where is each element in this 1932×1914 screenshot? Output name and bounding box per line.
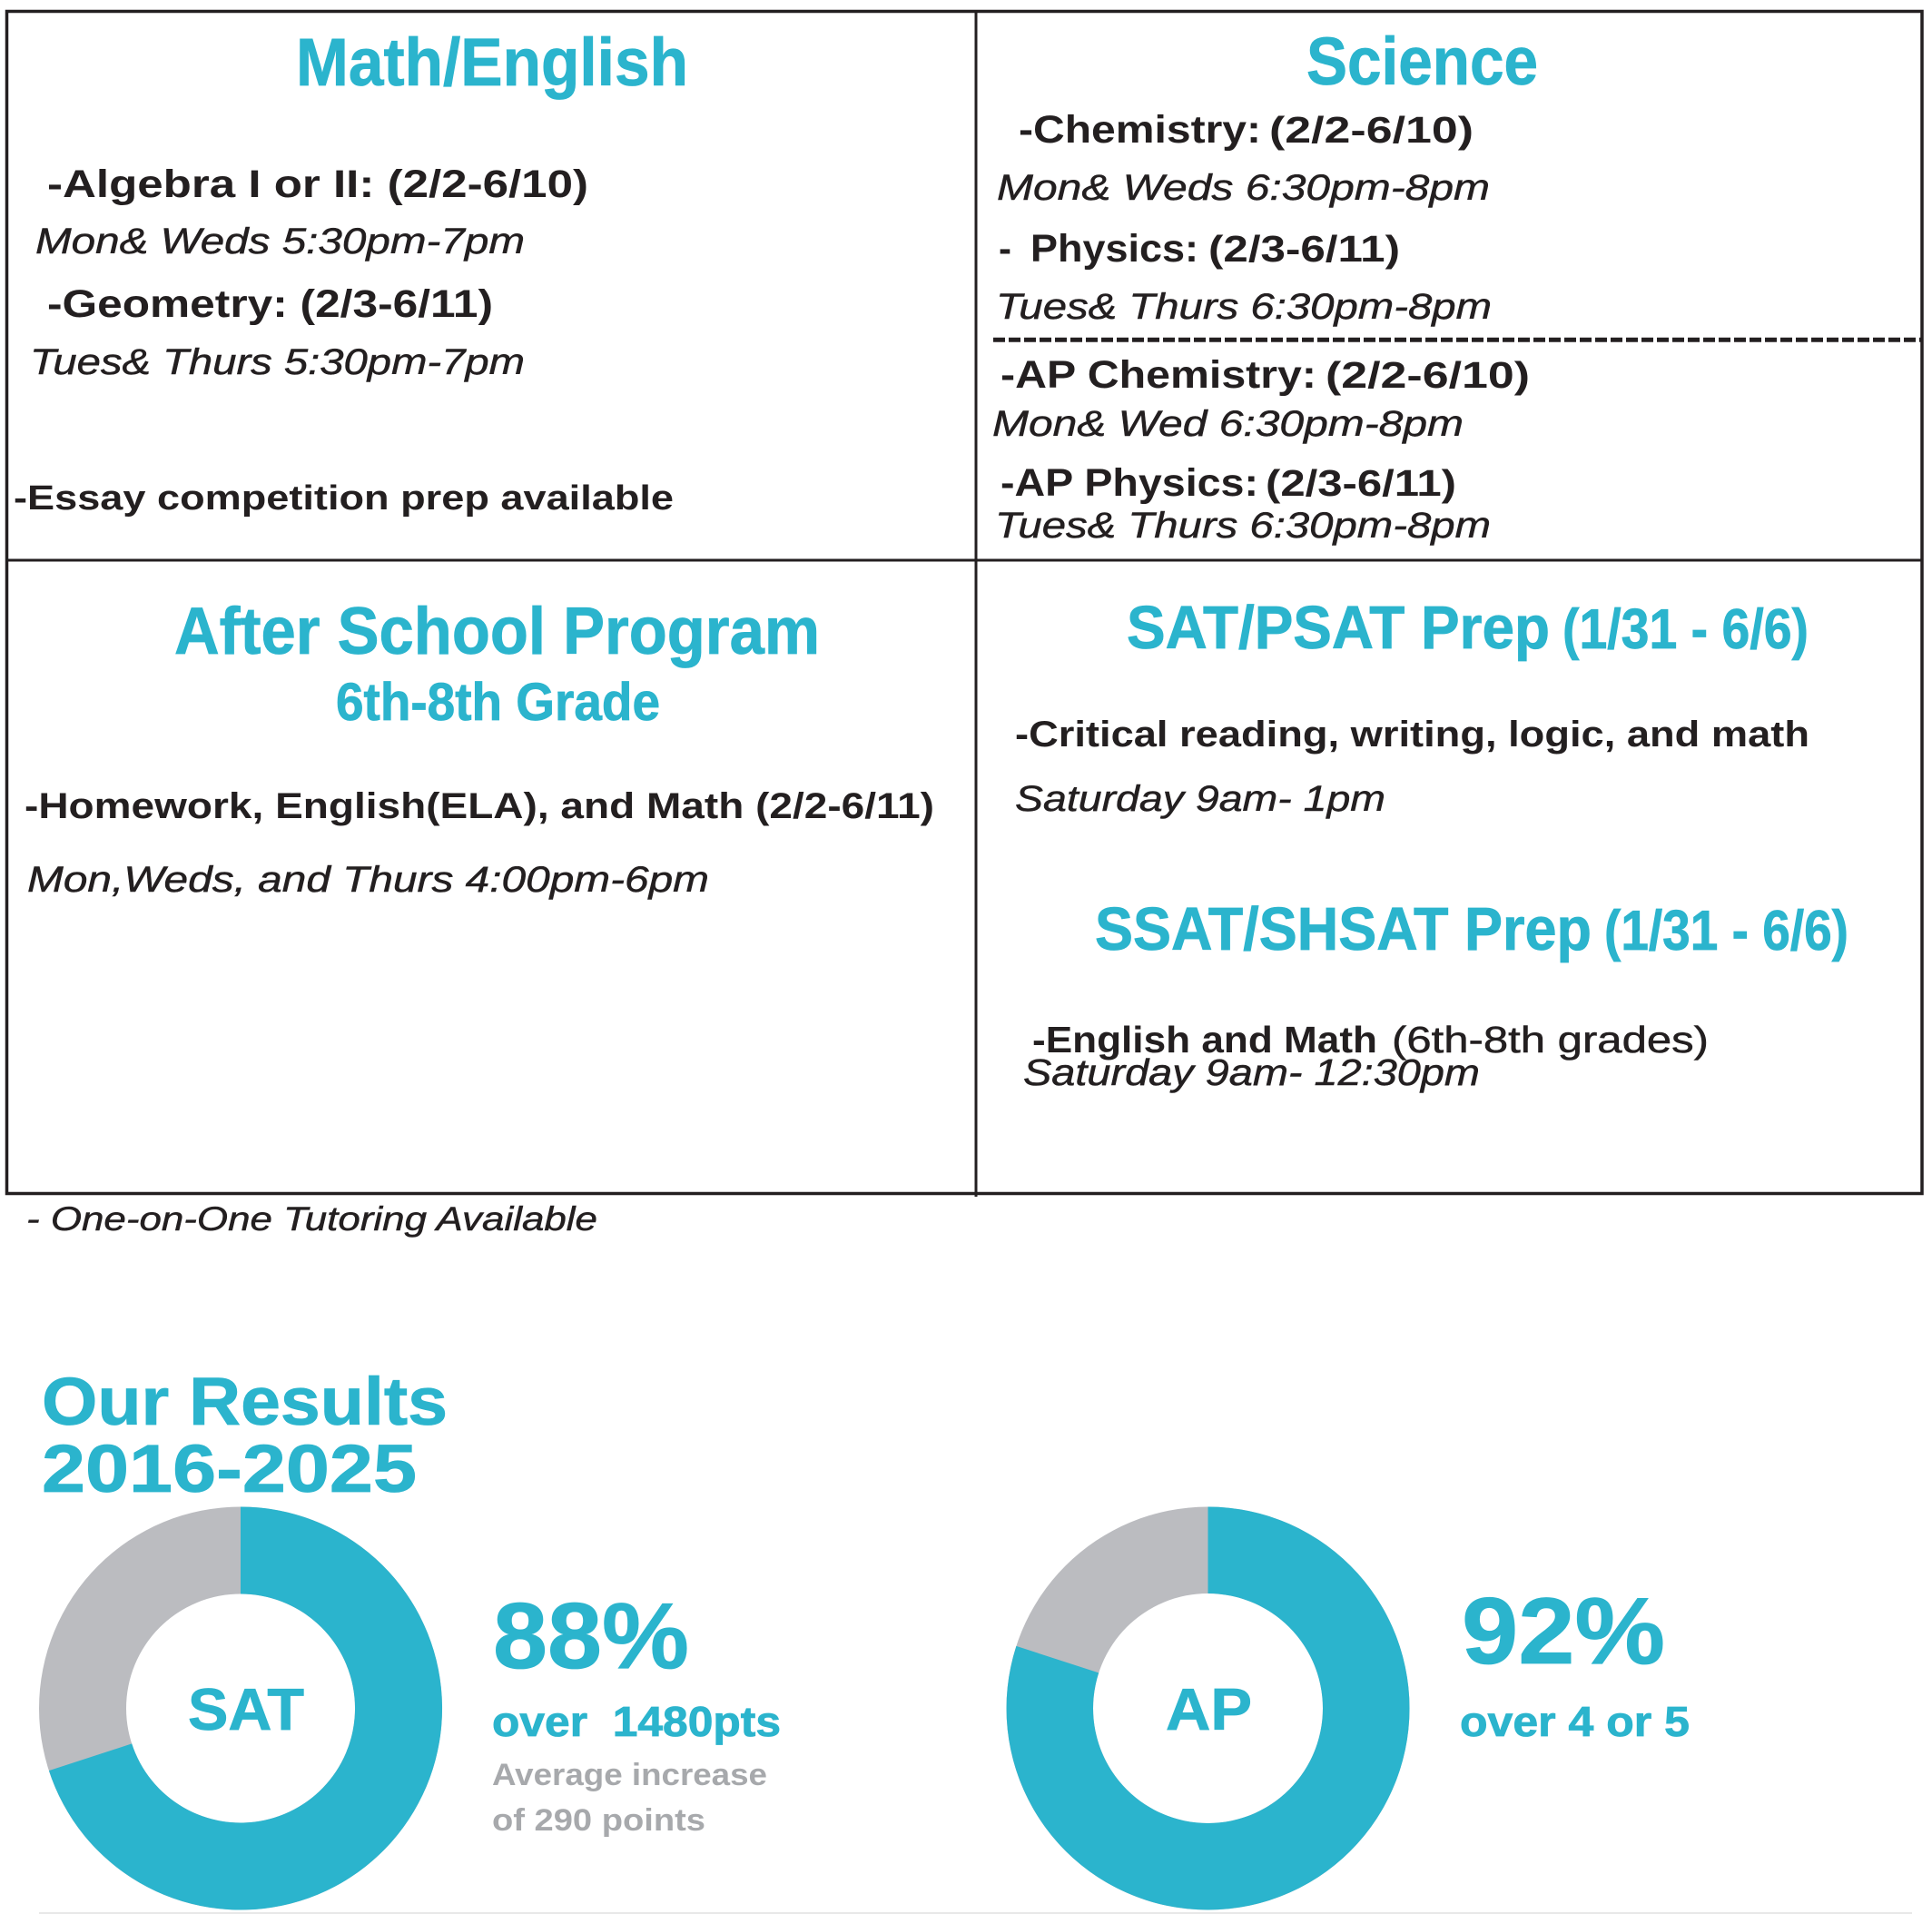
stat: SAT xyxy=(492,1583,781,1838)
schedule: AP Chemistry: Mon& Wed 6:30pm-8pm xyxy=(992,404,1464,444)
heading: SSAT/SHSAT Prep: (1/31 - 6/6) xyxy=(1604,900,1848,962)
class: AP Physics: (2/3-6/11) xyxy=(1266,462,1456,504)
value: 88%: 88% xyxy=(493,1583,689,1688)
class: Algebra: -Algebra I or II: (2/2-6/10) xyxy=(47,163,588,206)
class: Chemistry: (2/2-6/10) xyxy=(1269,109,1474,151)
panel: Math/English xyxy=(14,25,688,518)
heading: Math/English: Math/English xyxy=(296,25,688,100)
schedule: Geometry: Tues& Thurs 5:30pm-7pm xyxy=(30,342,525,382)
note: 290 points: of 290 points xyxy=(492,1803,705,1838)
schedule: Homework: Mon,Weds, and Thurs 4:00pm-6pm xyxy=(27,860,709,900)
class: SAT topics: -Critical reading, writing, logic, and math xyxy=(1015,715,1809,755)
heading: Our Results: Our Results xyxy=(42,1364,448,1439)
schedule: Chemistry: Mon& Weds 6:30pm-8pm xyxy=(997,168,1490,208)
heading: After School Program: After School Program xyxy=(174,595,820,668)
class: AP Chemistry: (2/2-6/10) xyxy=(1326,354,1530,396)
class: AP Physics xyxy=(1000,461,1456,505)
panel: test prep xyxy=(1015,594,1848,1093)
class: Chemistry xyxy=(1019,108,1474,152)
schedule: AP Physics: Tues& Thurs 6:30pm-8pm xyxy=(995,506,1491,546)
note: essay competition: -Essay competition prep available xyxy=(14,479,674,518)
section: Our Results xyxy=(39,1364,1690,1910)
donut chart: AP xyxy=(1006,1507,1410,1910)
caption: over 4 or 5: over 4 or 5 xyxy=(1460,1698,1690,1745)
schedule: Physics: Tues& Thurs 6:30pm-8pm xyxy=(996,287,1492,327)
donut chart: SAT xyxy=(39,1507,442,1910)
value: 92%: 92% xyxy=(1462,1579,1665,1684)
note: average increase: Average increase xyxy=(492,1758,767,1792)
schedule: Algebra: Mon& Weds 5:30pm-7pm xyxy=(35,222,525,261)
class: Homework: -Homework, English(ELA), and Math (2/2-6/11) xyxy=(25,786,934,826)
note: tutoring: - One-on-One Tutoring Available xyxy=(26,1200,597,1238)
class: Physics: (2/3-6/11) xyxy=(1208,228,1400,270)
schedule: SSAT: Saturday 9am- 12:30pm xyxy=(1023,1051,1480,1093)
class: SSAT topics: (6th-8th grades) xyxy=(1392,1019,1709,1061)
class: Physics xyxy=(999,227,1400,271)
heading: SAT/PSAT Prep: SAT/PSAT Prep xyxy=(1127,594,1550,662)
class: SSAT topics: -English and Math xyxy=(1032,1019,1377,1061)
class: SSAT topics xyxy=(1032,1019,1709,1061)
stat: AP xyxy=(1460,1579,1690,1745)
panel: After School Program xyxy=(25,595,934,900)
class: AP Chemistry xyxy=(1000,353,1530,397)
donut label: AP: AP xyxy=(1166,1676,1252,1742)
class: AP Chemistry: -AP Chemistry: xyxy=(1000,353,1316,397)
subheading: grade range: 6th-8th Grade xyxy=(336,673,660,732)
schedule table grid xyxy=(7,11,1922,1197)
schedule: SAT: Saturday 9am- 1pm xyxy=(1015,779,1385,819)
class: Physics: Physics: xyxy=(1030,227,1198,271)
class: Geometry: -Geometry: (2/3-6/11) xyxy=(47,282,493,326)
heading: SAT/PSAT Prep xyxy=(1127,594,1809,662)
donut label: SAT: SAT xyxy=(188,1676,304,1742)
class: Physics: - xyxy=(999,227,1011,271)
caption: over 1480pts: over 1480pts xyxy=(492,1698,781,1745)
heading: SAT/PSAT Prep: (1/31 - 6/6) xyxy=(1562,598,1809,661)
heading: Science: Science xyxy=(1306,24,1538,99)
heading: year range: 2016-2025 xyxy=(42,1431,417,1506)
class: Chemistry: -Chemistry: xyxy=(1019,108,1261,152)
heading: SSAT/SHSAT Prep: SSAT/SHSAT Prep xyxy=(1095,895,1592,963)
panel: Science xyxy=(992,24,1922,546)
class: AP Physics: -AP Physics: xyxy=(1000,461,1258,505)
